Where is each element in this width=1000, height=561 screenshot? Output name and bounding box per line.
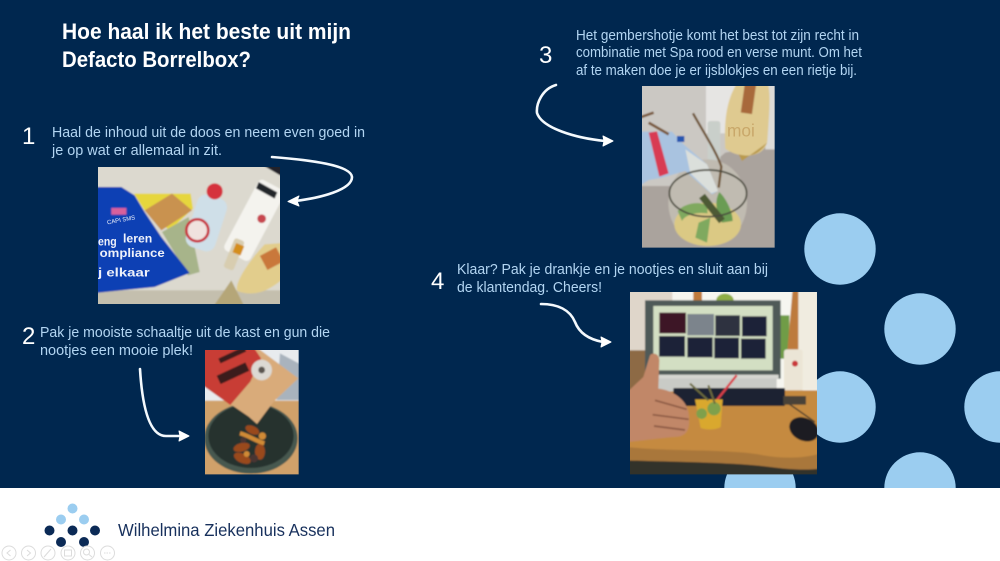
step 2 text bbox=[40, 325, 330, 359]
step 1 photo: box contents: j elkaar bbox=[97, 266, 150, 279]
step 4 text: Klaar? Pak je drankje en je nootjes en sluit aan bij bbox=[457, 262, 768, 278]
step 2 text: nootjes een mooie plek! bbox=[40, 343, 193, 359]
step 1 text: je op wat er allemaal in zit. bbox=[51, 143, 222, 159]
arrow step 4 bbox=[541, 304, 611, 347]
slideshow controls bbox=[2, 546, 114, 560]
step 4 photo: thumbs up at desk bbox=[627, 289, 823, 478]
step 3 text: combinatie met Spa rood en verse munt. Om het bbox=[576, 45, 862, 61]
footer band bbox=[0, 488, 1000, 561]
step 1 text: Haal de inhoud uit de doos en neem even goed in bbox=[52, 125, 365, 141]
step 1 photo: box contents: CAPI SMS bbox=[107, 215, 136, 226]
logo mark bbox=[44, 504, 100, 547]
step 1 photo: box contents: eng bbox=[98, 236, 117, 249]
arrow step 3 bbox=[537, 85, 613, 146]
logo wordmark: Wilhelmina Ziekenhuis Assen bbox=[118, 520, 335, 540]
step 4 text: de klantendag. Cheers! bbox=[457, 280, 602, 296]
title: Defacto Borrelbox? bbox=[62, 47, 251, 72]
step 3 text bbox=[576, 28, 862, 79]
step 3 photo: pouring into glass: moi bbox=[727, 121, 755, 141]
step 1 number: 1 bbox=[22, 123, 35, 150]
step 2 text: Pak je mooiste schaaltje uit de kast en gun die bbox=[40, 325, 330, 341]
step 2 number: 2 bbox=[22, 323, 35, 350]
step 1 text bbox=[51, 125, 365, 159]
step 4 number: 4 bbox=[431, 268, 444, 295]
step 3 text: Het gembershotje komt het best tot zijn recht in bbox=[576, 28, 859, 44]
step 3 number: 3 bbox=[539, 42, 552, 69]
step 3 text: af te maken doe je er ijsblokjes en een rietje bij. bbox=[576, 63, 857, 79]
step 3 photo: pouring into glass bbox=[639, 83, 778, 250]
step 1 photo: box contents: ompliance bbox=[100, 247, 165, 260]
decorative circles bbox=[724, 213, 1000, 524]
title bbox=[62, 19, 351, 72]
step 2 photo: nuts in bowl bbox=[205, 350, 299, 474]
arrow step 2 bbox=[140, 369, 189, 441]
step 1 photo: box contents bbox=[95, 164, 286, 308]
step 4 text bbox=[457, 262, 768, 296]
step 1 photo: box contents: leren bbox=[123, 232, 152, 245]
title: Hoe haal ik het beste uit mijn bbox=[62, 19, 351, 44]
arrow step 1 bbox=[272, 157, 352, 206]
